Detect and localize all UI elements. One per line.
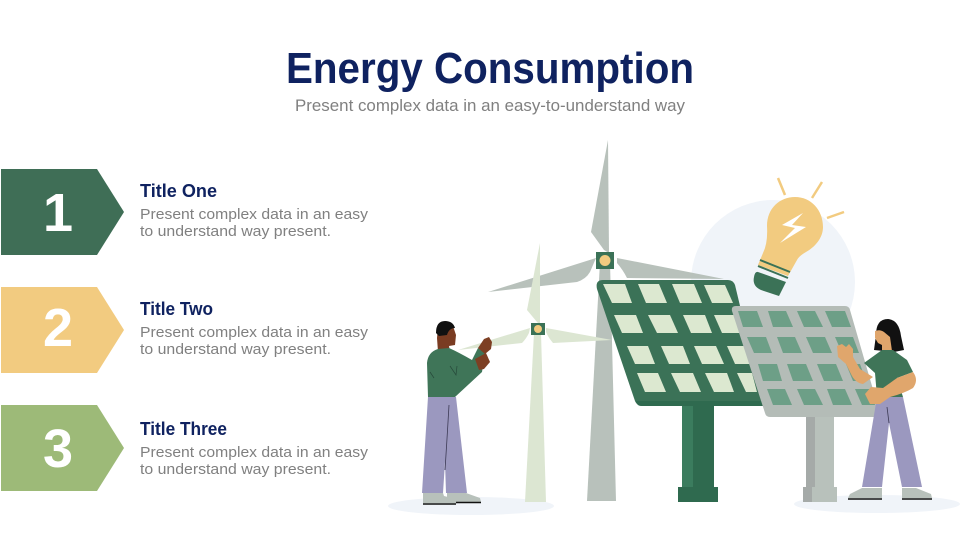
shirt <box>864 350 913 397</box>
small wind turbine <box>458 243 612 502</box>
description three: Present complex data in an easy <box>140 444 369 461</box>
title: Energy Consumption <box>286 44 694 93</box>
panel: item two <box>1 287 369 373</box>
trousers <box>862 397 922 487</box>
heading: title two: Title Two <box>140 299 213 319</box>
green solar panel <box>597 280 764 406</box>
shoes <box>848 488 882 498</box>
arrow badge 3 <box>1 405 124 491</box>
ground shadows <box>388 495 960 515</box>
description two: Present complex data in an easy <box>140 324 369 341</box>
person: woman <box>837 319 932 499</box>
green solar panel stand <box>678 404 718 502</box>
hair <box>874 319 904 352</box>
panel: item three <box>1 405 369 491</box>
light bulb <box>754 178 844 296</box>
description three: to understand way present. <box>140 461 331 478</box>
gray panel stand <box>803 415 837 502</box>
bulb rays <box>778 178 844 218</box>
arrow badge 1 <box>1 169 124 255</box>
sweater <box>427 348 485 397</box>
description two: to understand way present. <box>140 341 331 358</box>
shoes <box>423 493 456 503</box>
heading: title one: Title One <box>140 181 217 201</box>
right arm and hand <box>865 372 916 404</box>
gray solar panel <box>732 306 881 417</box>
left arm and hand <box>837 344 873 384</box>
number 2: 2 <box>43 298 73 358</box>
trousers <box>422 397 467 493</box>
number 1: 1 <box>43 183 73 243</box>
subtitle: Present complex data in an easy-to-understand way <box>295 96 685 115</box>
person: man <box>422 321 492 504</box>
panel: item one <box>1 169 369 255</box>
hair <box>436 321 455 336</box>
description one: Present complex data in an easy <box>140 206 369 223</box>
hands <box>478 337 492 354</box>
description one: to understand way present. <box>140 223 331 240</box>
large wind turbine <box>488 140 724 501</box>
background circle <box>691 200 855 364</box>
heading: title three: Title Three <box>140 419 227 439</box>
number 3: 3 <box>43 419 73 479</box>
face and neck <box>875 330 892 351</box>
arrow badge 2 <box>1 287 124 373</box>
illustration: renewable energy scene <box>388 140 960 515</box>
neck and head <box>437 326 456 352</box>
